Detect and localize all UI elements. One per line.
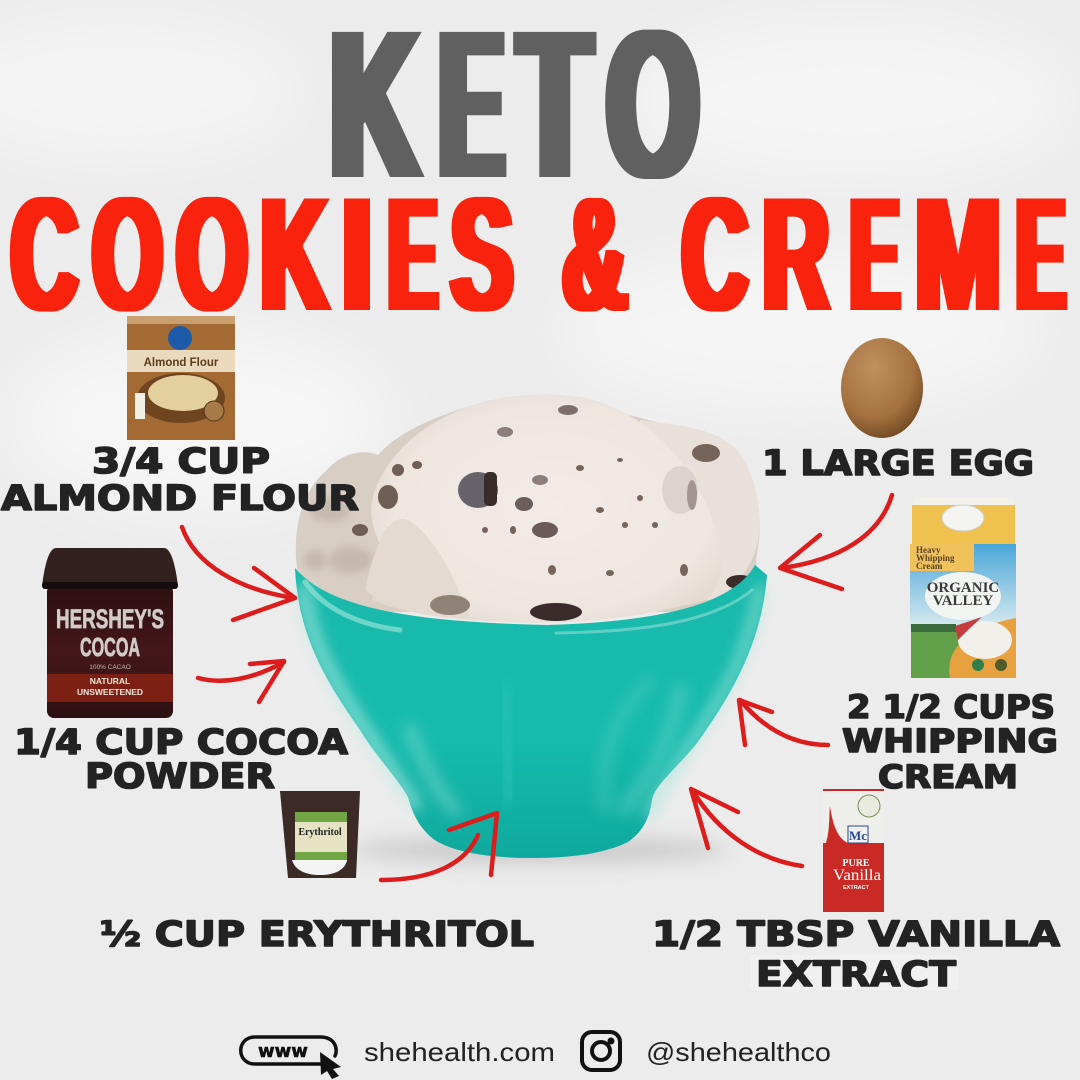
chips [352, 405, 754, 621]
ice cream scoop [296, 395, 760, 623]
website text: shehealth.com [364, 1037, 555, 1067]
handle text: @shehealthco [646, 1037, 831, 1067]
label: whipping cream: CREAM [878, 758, 1018, 796]
label: egg: 1 LARGE EGG [762, 444, 1034, 484]
product: vanilla: PURE [842, 858, 870, 869]
icon: instagram [582, 1032, 620, 1070]
teal bowl [295, 565, 767, 858]
right lobe [640, 420, 759, 600]
label: almond flour: 3/4 CUP [92, 442, 270, 482]
label: erythritol: ½ CUP ERYTHRITOL [100, 915, 534, 955]
product: cocoa [42, 548, 178, 718]
bowl shadow [350, 836, 730, 864]
bowl edge highlights [304, 582, 760, 815]
arrow: vanilla to bowl [691, 789, 802, 866]
label: vanilla: 1/2 TBSP VANILLA [652, 915, 1060, 955]
label: almond flour [1, 442, 359, 519]
title: COOKIES & CREME: O [92, 164, 162, 345]
title: COOKIES & CREME: K [261, 164, 328, 345]
arrow: egg to bowl [780, 495, 892, 589]
product: whipping cream carton [910, 497, 1016, 678]
main scoop [371, 395, 722, 623]
title: COOKIES & CREME: E [850, 164, 899, 345]
product: cocoa: NATURAL [90, 676, 130, 686]
icon: www cursor: www [258, 1041, 308, 1062]
label: whipping cream [842, 688, 1058, 796]
product: whipping cream carton: Cream [916, 561, 943, 571]
title: COOKIES & CREME: M [915, 164, 1001, 345]
product: cocoa: HERSHEY'S [56, 604, 164, 634]
title: COOKIES & CREME: R [763, 164, 829, 345]
label: whipping cream: WHIPPING [842, 722, 1058, 760]
left lobe texture [303, 498, 372, 574]
title: COOKIES & CREME: & [563, 164, 627, 345]
product: erythritol [280, 791, 360, 878]
title: COOKIES & CREME: C [682, 164, 748, 345]
arrow: erythritol to bowl [381, 813, 497, 880]
title: COOKIES & CREME: S [451, 164, 513, 345]
arrow: whipping cream to bowl [739, 700, 828, 745]
label: almond flour: ALMOND FLOUR [1, 479, 359, 519]
product: almond flour: Almond Flour [144, 357, 219, 369]
title: COOKIES & CREME: I [342, 164, 372, 345]
product: egg [841, 338, 923, 438]
label: vanilla [652, 915, 1060, 995]
product: cocoa: COCOA [80, 632, 140, 662]
product: vanilla [823, 789, 884, 912]
title: KETO [331, 0, 698, 222]
product: vanilla: Vanilla [833, 867, 881, 884]
arrow: cocoa to bowl [198, 661, 284, 702]
product: whipping cream carton: VALLEY [933, 593, 993, 609]
icon: www cursor [241, 1037, 341, 1079]
product: erythritol: Erythritol [298, 827, 342, 838]
footer: instagram [582, 1032, 831, 1070]
label: cocoa [14, 723, 348, 797]
product: vanilla: Mc [849, 828, 867, 843]
product: cocoa: 100% CACAO [89, 664, 131, 671]
front ridge [365, 519, 470, 618]
title: COOKIES & CREME: C [11, 164, 78, 345]
product: almond flour [127, 316, 235, 440]
title: COOKIES & CREME: O [176, 164, 248, 345]
product: whipping cream carton: Heavy [916, 545, 941, 555]
product: whipping cream carton: Whipping [916, 553, 955, 563]
label: cocoa: POWDER [85, 757, 275, 797]
footer: website [241, 1037, 555, 1079]
product: whipping cream carton: ORGANIC [927, 580, 999, 596]
arrow: almond flour to bowl [182, 527, 295, 620]
label: vanilla: EXTRACT [756, 955, 956, 995]
label: whipping cream: 2 1/2 CUPS [847, 688, 1055, 726]
label: cocoa: 1/4 CUP COCOA [14, 723, 348, 763]
title: COOKIES & CREME: E [388, 164, 437, 345]
product: cocoa: UNSWEETENED [77, 687, 143, 697]
title: COOKIES & CREME [11, 164, 1065, 345]
product: vanilla: EXTRACT [843, 885, 870, 891]
silhouette [296, 395, 760, 612]
